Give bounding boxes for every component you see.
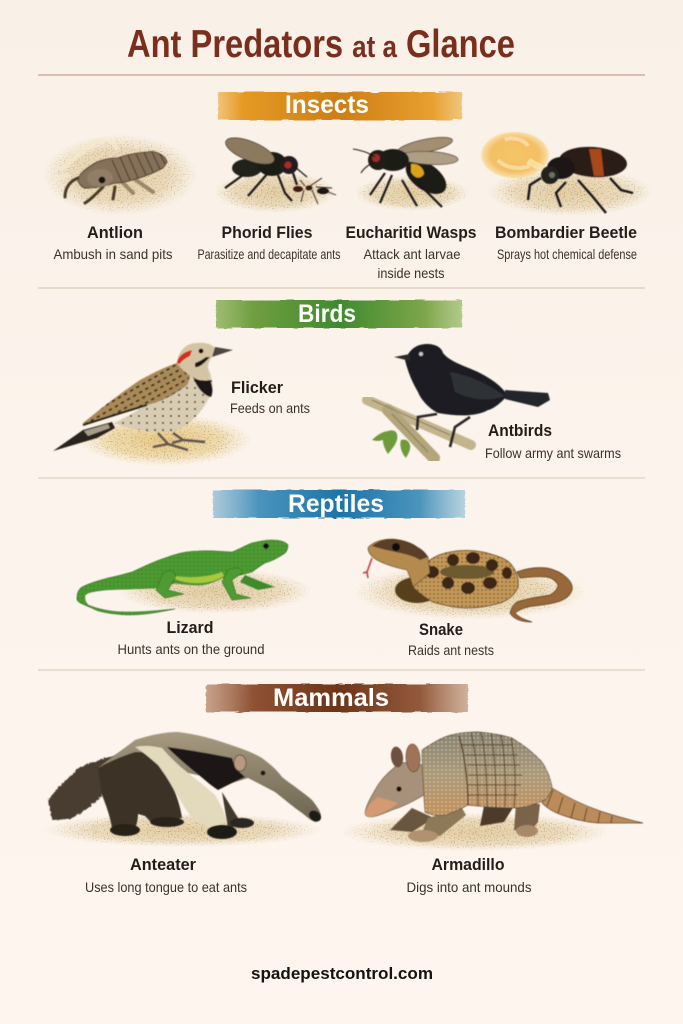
label: phorid flies: Phorid Flies (222, 223, 312, 242)
label: antlion (54, 223, 172, 262)
label: bombardier beetle (495, 223, 637, 262)
label: lizard (118, 618, 264, 657)
predator: lizard (77, 540, 313, 657)
label: eucharitid wasps (346, 223, 476, 281)
tail fur (48, 755, 125, 820)
label: flicker: Feeds on ants (230, 400, 310, 416)
banner: mammals: Mammals (273, 684, 389, 712)
label: phorid flies: Parasitize and decapitate ants (198, 246, 340, 262)
predator: antbirds (367, 344, 621, 461)
predator: flicker (53, 343, 310, 466)
predator: phorid flies (198, 132, 340, 262)
footer website: spadepestcontrol.com (251, 964, 433, 983)
label: armadillo (406, 855, 532, 895)
predator: anteater (42, 732, 323, 895)
title: Ant Predators at a Glance (127, 23, 515, 66)
label: armadillo: Armadillo (432, 855, 504, 874)
label: eucharitid wasps: Eucharitid Wasps (346, 223, 476, 242)
label: lizard: Lizard (166, 618, 214, 637)
label: armadillo: Digs into ant mounds (406, 879, 532, 895)
label: antbirds (485, 421, 621, 461)
label: antbirds: Follow army ant swarms (485, 445, 621, 461)
label: antlion: Ambush in sand pits (54, 246, 172, 262)
section: reptiles (77, 490, 588, 658)
predator: bombardier beetle (480, 131, 654, 262)
predator: armadillo (340, 732, 643, 895)
label: anteater (85, 855, 247, 895)
label: flicker (230, 378, 310, 416)
banner: insects: Insects (285, 91, 369, 119)
label: anteater: Anteater (130, 855, 196, 874)
label: snake: Snake (419, 620, 463, 639)
banner: birds (216, 300, 462, 328)
label: snake (408, 620, 494, 658)
predator: antlion (42, 134, 198, 262)
label: lizard: Hunts ants on the ground (118, 641, 264, 657)
branch (367, 400, 471, 458)
label: bombardier beetle: Sprays hot chemical defense (497, 246, 637, 262)
banner: birds: Birds (298, 300, 356, 328)
label: bombardier beetle: Bombardier Beetle (495, 223, 637, 242)
section: birds (53, 300, 621, 466)
banner: insects (218, 91, 462, 120)
section: mammals (42, 684, 643, 895)
label: antlion: Antlion (87, 223, 143, 242)
banner: reptiles: Reptiles (288, 490, 384, 518)
label: eucharitid wasps: inside nests (378, 265, 444, 281)
label: antbirds: Antbirds (488, 421, 552, 440)
predator: eucharitid wasps (346, 134, 476, 281)
label: anteater: Uses long tongue to eat ants (85, 879, 247, 895)
label: snake: Raids ant nests (408, 642, 494, 658)
predator: snake (352, 539, 588, 658)
label: eucharitid wasps: Attack ant larvae (364, 246, 461, 262)
section: insects (42, 91, 654, 281)
banner: reptiles (213, 490, 465, 518)
banner: mammals (206, 684, 468, 712)
label: phorid flies (198, 223, 340, 262)
label: flicker: Flicker (231, 378, 283, 397)
